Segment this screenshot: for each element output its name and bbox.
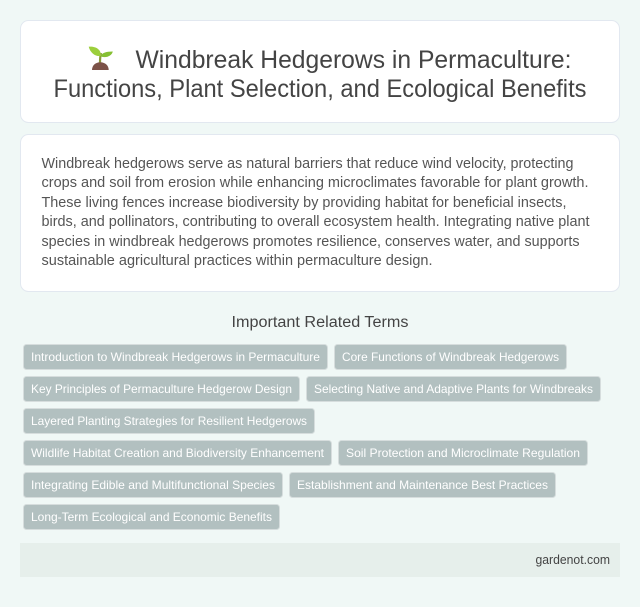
panel: title card xyxy=(20,20,620,122)
description text: Windbreak hedgerows serve as natural barriers that reduce wind velocity, protecting xyxy=(42,156,574,172)
tag: Long-Term Ecological and Economic Benefits xyxy=(31,510,272,524)
title xyxy=(54,46,586,103)
tag list xyxy=(24,344,600,530)
tag xyxy=(24,472,282,498)
description text: species in windbreak hedgerows promotes resilience, conserves water, and supports xyxy=(42,234,580,250)
tag: Introduction to Windbreak Hedgerows in Permaculture xyxy=(31,350,320,364)
tag xyxy=(24,440,332,466)
tag xyxy=(290,472,556,498)
tag: Integrating Edible and Multifunctional Species xyxy=(31,478,275,492)
description text: crops and soil from erosion while enhancing microclimates favorable for plant growth. xyxy=(42,175,588,191)
tag: Key Principles of Permaculture Hedgerow Design xyxy=(31,382,292,396)
tag: Wildlife Habitat Creation and Biodiversity Enhancement xyxy=(31,446,325,460)
tag xyxy=(334,344,566,370)
tag xyxy=(24,344,328,370)
icon: seedling xyxy=(89,47,113,70)
tag xyxy=(306,376,600,402)
tag: Core Functions of Windbreak Hedgerows xyxy=(342,350,559,364)
footer source: gardenot.com xyxy=(536,553,610,567)
description text: sustainable agricultural practices within permaculture design. xyxy=(42,253,432,269)
tag: Layered Planting Strategies for Resilient Hedgerows xyxy=(31,414,307,428)
tag: Selecting Native and Adaptive Plants for Windbreaks xyxy=(314,382,593,396)
tag xyxy=(24,376,300,402)
title: Functions, Plant Selection, and Ecological Benefits xyxy=(54,75,586,103)
footer xyxy=(20,543,620,577)
tag xyxy=(338,440,588,466)
tag xyxy=(24,408,314,434)
panel: description card xyxy=(20,134,620,292)
description text xyxy=(42,156,590,269)
description text: birds, and pollinators, contributing to overall ecosystem health. Integrating native plant xyxy=(42,214,590,230)
tag xyxy=(24,504,280,530)
title: Windbreak Hedgerows in Permaculture: xyxy=(136,46,572,74)
tag: Soil Protection and Microclimate Regulation xyxy=(346,446,580,460)
heading: related terms: Important Related Terms xyxy=(232,314,409,331)
description text: These living fences increase biodiversity by providing habitat for beneficial insects, xyxy=(42,195,566,211)
tag: Establishment and Maintenance Best Practices xyxy=(297,478,548,492)
